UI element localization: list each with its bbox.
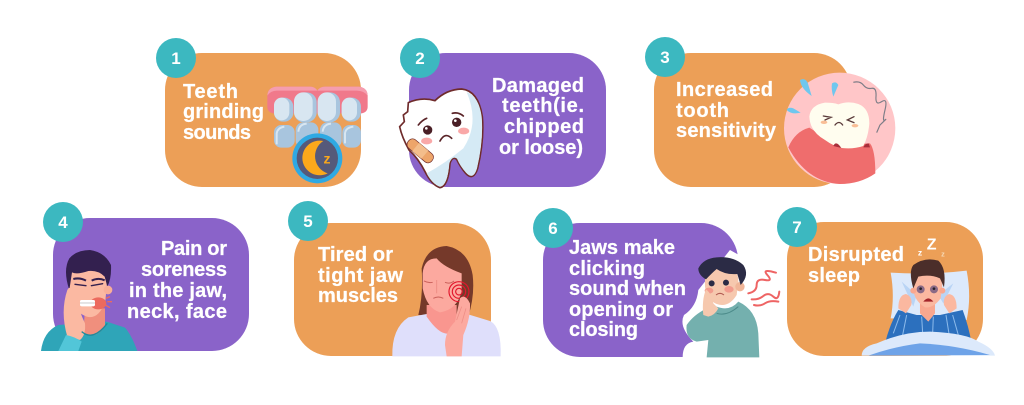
- panel 3: increased tooth sensitivity: [645, 37, 895, 187]
- text: jaws make clicking sound: clicking: [569, 258, 645, 280]
- text: increased tooth sensitivity: sensitivity: [676, 120, 777, 142]
- number badge 5: [288, 201, 328, 241]
- number badge 1: [156, 38, 196, 78]
- text: teeth grinding sounds: grinding: [183, 101, 264, 123]
- text: jaws make clicking sound: closing: [569, 319, 638, 341]
- text: increased tooth sensitivity: tooth: [676, 100, 729, 122]
- panel 2: damaged teeth: [400, 38, 606, 188]
- text: jaws make clicking sound: Jaws make: [569, 237, 675, 259]
- number badge 1: 1: [171, 49, 181, 68]
- text: damaged teeth: Damaged: [492, 75, 584, 97]
- text: jaws make clicking sound: opening or: [569, 299, 673, 321]
- icon: sensitive tooth in pink circle: [784, 73, 895, 184]
- icon: boy holding jaw with pain squiggles: [682, 250, 783, 357]
- text: increased tooth sensitivity: Increased: [676, 79, 773, 101]
- text: disrupted sleep: [808, 244, 904, 287]
- text: jaws make clicking sound: [569, 237, 686, 341]
- text: teeth grinding sounds: sounds: [183, 122, 251, 144]
- text: pain or soreness: in the jaw,: [129, 280, 227, 302]
- panel 4: pain or soreness: [41, 202, 249, 351]
- text: tired or tight jaw muscles: Tired or: [318, 244, 393, 266]
- text: teeth grinding sounds: [183, 81, 264, 144]
- text: tired or tight jaw muscles: tight jaw: [318, 265, 403, 287]
- text: increased tooth sensitivity: [676, 79, 777, 142]
- panel 6: jaws make clicking sound: [533, 208, 783, 357]
- number badge 4: 4: [58, 213, 68, 232]
- text: teeth grinding sounds: Teeth: [183, 81, 238, 103]
- panel 7: disrupted sleep: [777, 207, 995, 356]
- number badge 6: [533, 208, 573, 248]
- icon: tired man in bed: Z: [927, 236, 937, 253]
- text: jaws make clicking sound: sound when: [569, 278, 686, 300]
- icon: tired man in bed: z: [941, 250, 945, 259]
- text: tired or tight jaw muscles: muscles: [318, 285, 398, 307]
- icon: chipped tooth with bandage: [400, 89, 483, 188]
- icon: man holding aching jaw: [41, 250, 137, 351]
- number badge 3: [645, 37, 685, 77]
- number badge 7: [777, 207, 817, 247]
- text: disrupted sleep: sleep: [808, 265, 860, 287]
- text: damaged teeth: or loose): [499, 137, 583, 159]
- number badge 2: [400, 38, 440, 78]
- number badge 7: 7: [792, 218, 802, 237]
- number badge 4: [43, 202, 83, 242]
- text: disrupted sleep: Disrupted: [808, 244, 904, 266]
- icon: teeth with moon badge: z: [323, 150, 330, 166]
- icon: tired man in bed: [862, 236, 995, 356]
- number badge 5: 5: [303, 212, 313, 231]
- panel 5: tired or tight jaw muscles: [288, 201, 501, 356]
- text: pain or soreness: neck, face: [127, 301, 227, 323]
- text: damaged teeth: chipped: [504, 116, 584, 138]
- text: damaged teeth: teeth(ie.: [502, 95, 584, 117]
- number badge 6: 6: [548, 219, 558, 238]
- text: tired or tight jaw muscles: [318, 244, 403, 307]
- icon: woman with jaw pain: [392, 246, 501, 356]
- number badge 2: 2: [415, 49, 425, 68]
- icon: tired man in bed: z: [918, 247, 923, 257]
- text: pain or soreness: [127, 238, 227, 323]
- text: pain or soreness: Pain or: [161, 238, 227, 260]
- icon: teeth with moon badge: [267, 87, 368, 183]
- text: damaged teeth: [492, 75, 584, 159]
- number badge 3: 3: [660, 48, 670, 67]
- text: pain or soreness: soreness: [141, 259, 227, 281]
- panel 1: teeth grinding sounds: [156, 38, 368, 187]
